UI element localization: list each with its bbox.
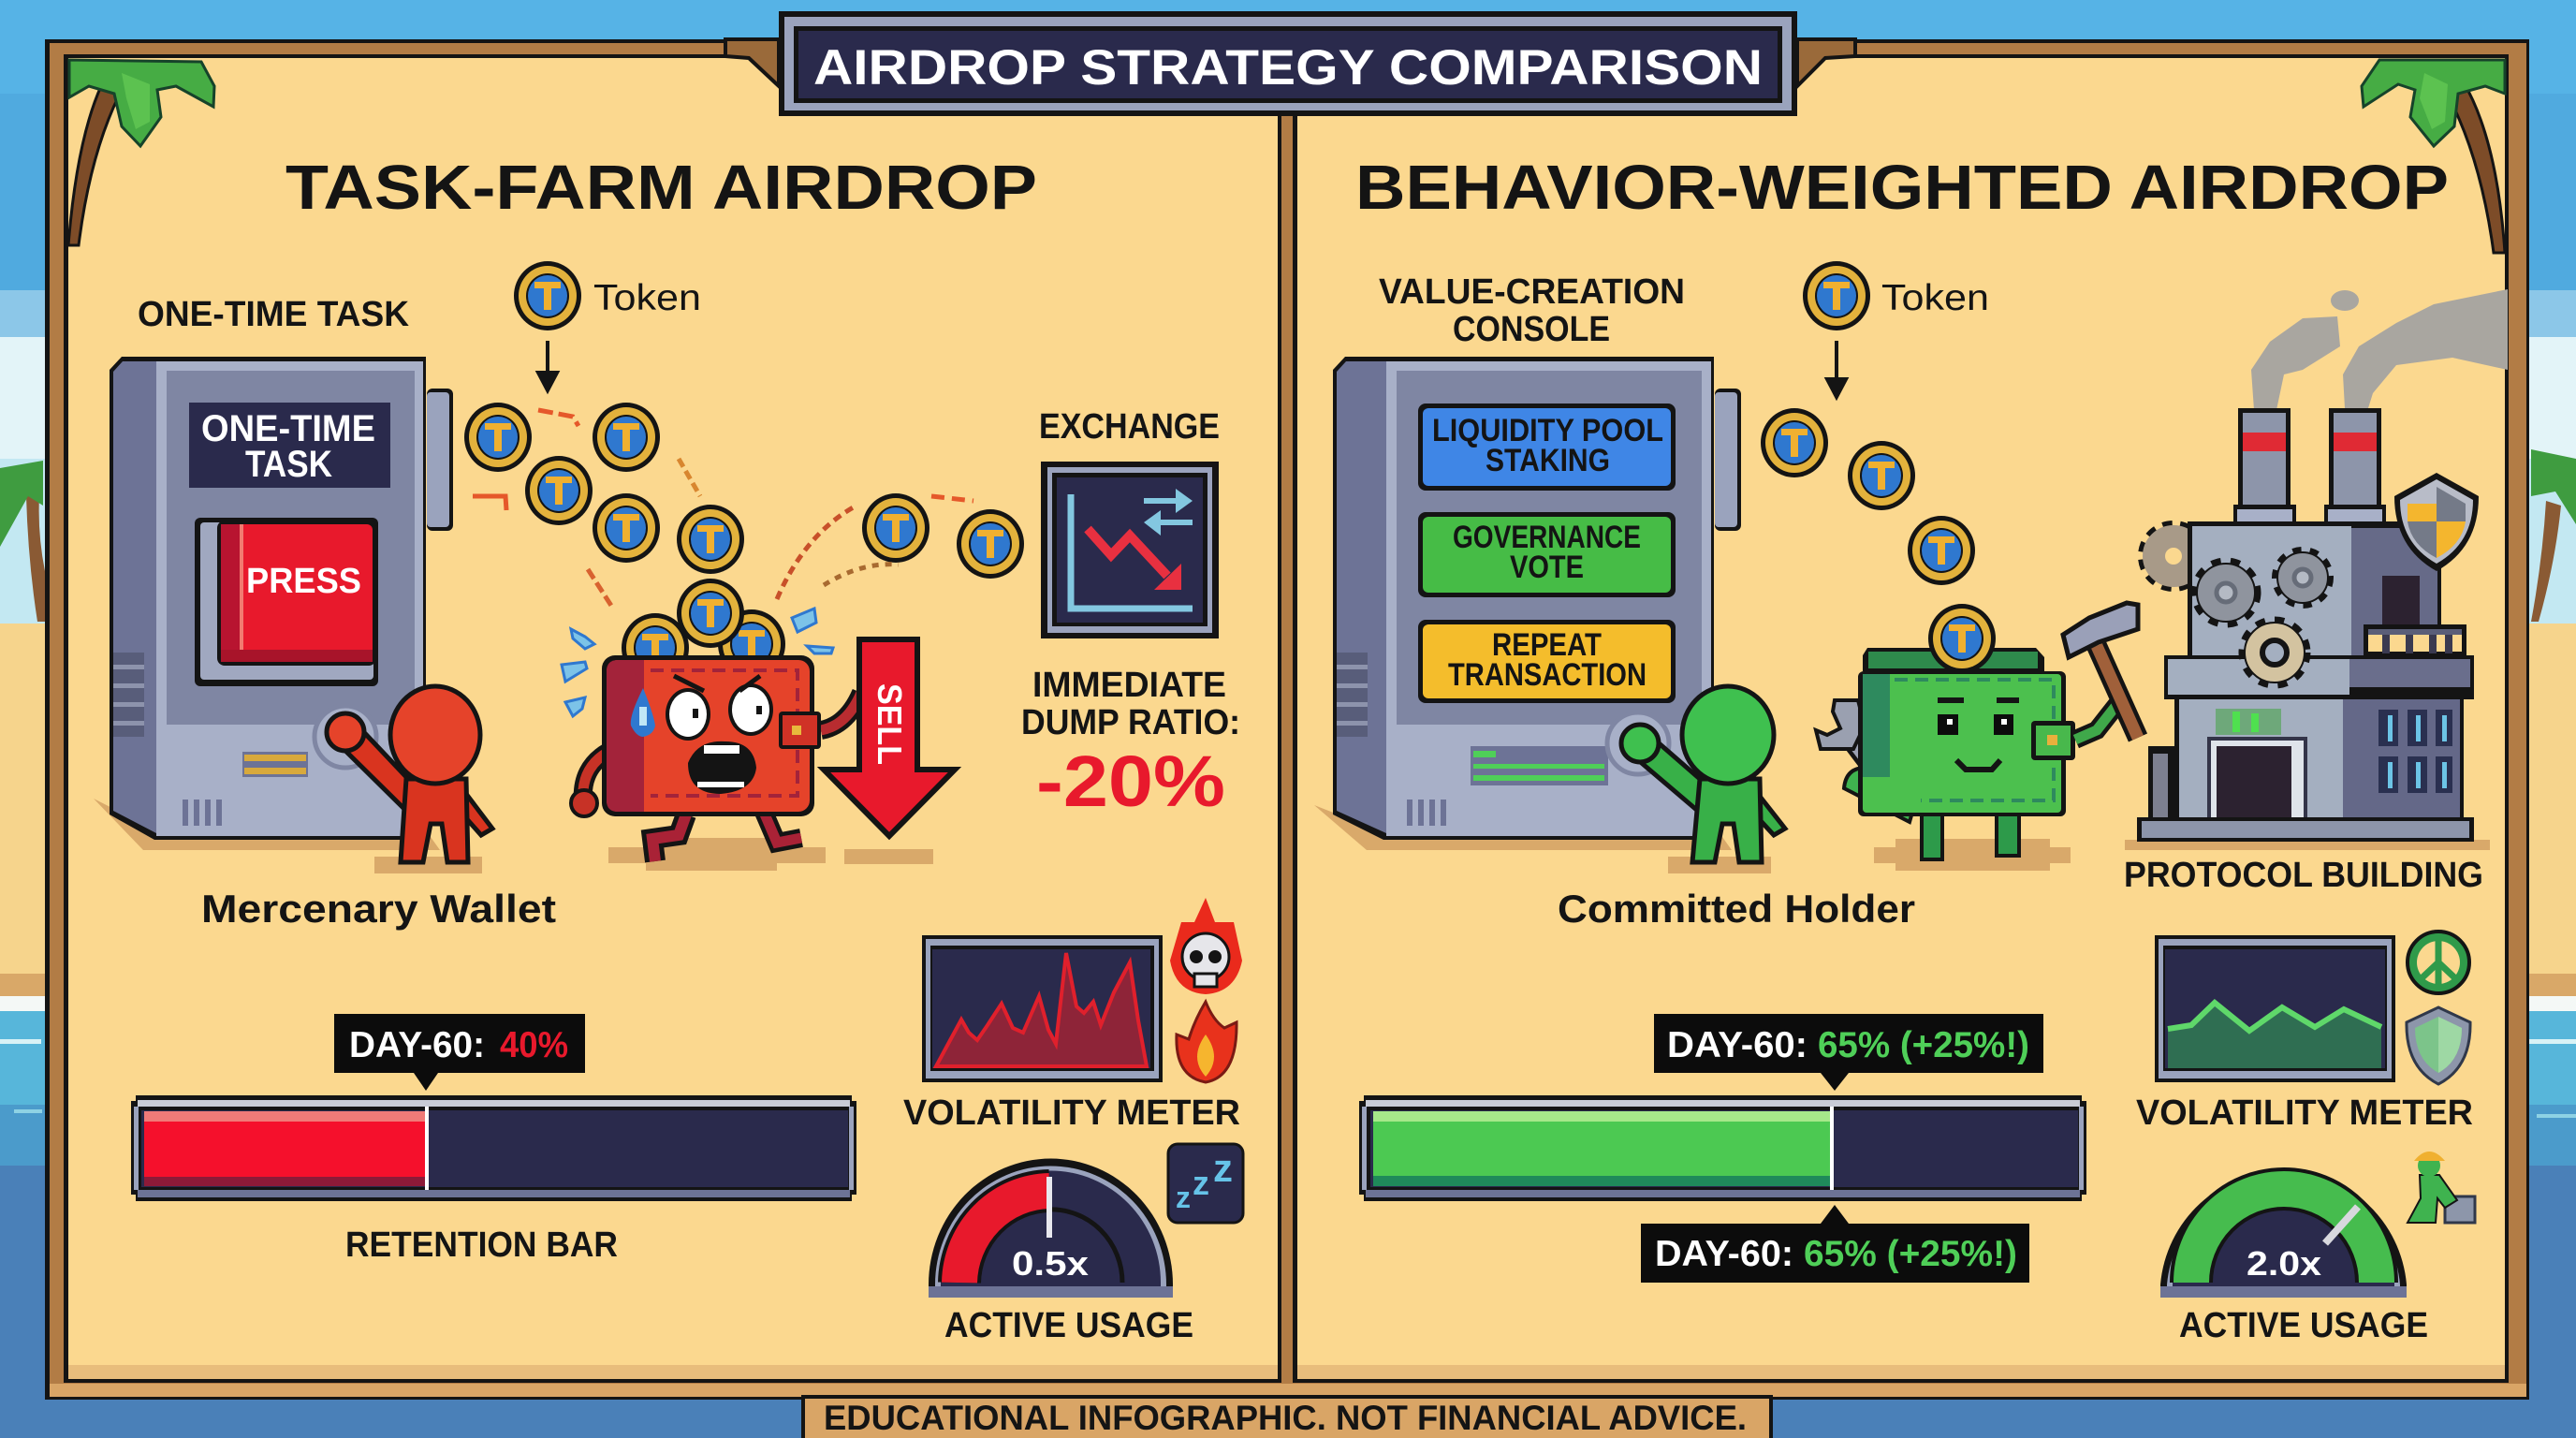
- motion arrows: [473, 410, 973, 609]
- icon: falling coins: [1761, 408, 1975, 585]
- label: token: Token: [1881, 278, 1989, 318]
- retention value: 40%: [500, 1025, 568, 1065]
- label: exchange: EXCHANGE: [1039, 407, 1220, 447]
- label: volatility meter: VOLATILITY METER: [2136, 1093, 2473, 1133]
- screen label: TASK: [245, 444, 332, 485]
- tooltip: day-60 retention: DAY-60:: [349, 1025, 485, 1065]
- disclaimer: EDUCATIONAL INFOGRAPHIC. NOT FINANCIAL ADVICE.: [824, 1399, 1747, 1437]
- machine: value-creation console: [1314, 357, 1741, 850]
- retention bar: [1359, 1095, 2086, 1201]
- icon: token: [1803, 261, 1870, 330]
- title: AIRDROP STRATEGY COMPARISON: [813, 40, 1763, 95]
- gauge value: 2.0x: [2247, 1244, 2321, 1283]
- screen label: ONE-TIME: [201, 408, 375, 449]
- label: protocol building: PROTOCOL BUILDING: [2124, 856, 2483, 895]
- icon: sleeping zzz: z: [1176, 1181, 1191, 1214]
- label: volatility meter: VOLATILITY METER: [903, 1093, 1240, 1133]
- icon: peace sign: [2408, 932, 2469, 993]
- label: mercenary wallet: Mercenary Wallet: [201, 887, 556, 931]
- arrow: token drop: [1827, 341, 1846, 397]
- retention bar: [131, 1095, 856, 1201]
- button: governance vote: GOVERNANCE: [1453, 520, 1641, 555]
- tooltip: day-60 retention top: [1654, 1014, 2043, 1091]
- center divider: [1278, 112, 1297, 1383]
- gauge value: 0.5x: [1012, 1244, 1089, 1283]
- icon: exchange screen: [1041, 462, 1219, 638]
- icon: wooden bracket left: [725, 39, 779, 86]
- shadow under figures: [374, 838, 933, 873]
- icon: smoke: [2251, 289, 2508, 410]
- footer plaque: [801, 1395, 1773, 1438]
- button: repeat transaction: TRANSACTION: [1448, 657, 1647, 693]
- panel: task-farm airdrop: [94, 153, 1243, 1345]
- icon: sleeping zzz: z: [1193, 1164, 1209, 1202]
- tooltip: day-60 retention bottom: [1641, 1205, 2029, 1283]
- label: active usage: ACTIVE USAGE: [2179, 1306, 2428, 1345]
- heading: behavior-weighted: BEHAVIOR-WEIGHTED AIRDROP: [1355, 153, 2449, 223]
- label: committed holder: Committed Holder: [1558, 887, 1915, 931]
- label: console: CONSOLE: [1453, 310, 1610, 349]
- icon: flaming skull: [1170, 898, 1242, 994]
- icon: flame: [1177, 1002, 1237, 1082]
- icon: wrench: [1816, 700, 1875, 770]
- retention value: 65% (+25%!): [1804, 1234, 2017, 1274]
- character: green holder: [1607, 686, 1785, 862]
- callout: dump ratio: IMMEDIATE: [1032, 666, 1226, 705]
- button: liquidity pool staking: STAKING: [1486, 443, 1610, 478]
- retention value: 65% (+25%!): [1818, 1025, 2029, 1065]
- button: governance vote: [1418, 512, 1676, 597]
- dump ratio value: -20%: [1036, 741, 1225, 822]
- tooltip: day-60 retention: [334, 1014, 585, 1091]
- tooltip: day-60 retention bottom: DAY-60:: [1655, 1234, 1793, 1274]
- button label: PRESS: [246, 562, 361, 601]
- callout: dump ratio: [1021, 666, 1240, 822]
- button: governance vote: VOTE: [1510, 550, 1584, 585]
- icon: sleeping zzz: z: [1213, 1146, 1233, 1190]
- icon: shield on factory: [2394, 473, 2479, 571]
- button: repeat transaction: REPEAT: [1492, 627, 1602, 663]
- title plaque: [779, 11, 1797, 116]
- icon: gears: [2195, 550, 2330, 684]
- volatility meter: spiky: [922, 935, 1163, 1082]
- icon: hammer: [2063, 603, 2138, 738]
- dump ratio label: DUMP RATIO:: [1021, 703, 1240, 742]
- button: liquidity pool staking: LIQUIDITY POOL: [1432, 413, 1663, 448]
- shadow under figures: [1668, 839, 2071, 873]
- heading: task-farm: TASK-FARM AIRDROP: [285, 153, 1037, 223]
- icon: wooden bracket right: [1797, 39, 1855, 86]
- panel: behavior-weighted airdrop: [1314, 153, 2508, 1345]
- sell label: SELL: [871, 683, 909, 765]
- label: active usage: ACTIVE USAGE: [944, 1306, 1193, 1345]
- icon: builder: [2408, 1152, 2475, 1223]
- label: one-time task: ONE-TIME TASK: [138, 295, 410, 334]
- icon: sweat drops: [562, 609, 833, 716]
- arrow: token drop: [538, 341, 557, 390]
- gauge: active usage high: [2160, 1171, 2407, 1298]
- tooltip: day-60 retention top: DAY-60:: [1667, 1025, 1808, 1065]
- icon: palm top left: [68, 60, 214, 245]
- machine: one-time task: [94, 357, 453, 850]
- icon: token: [514, 261, 581, 330]
- button: repeat transaction: [1418, 620, 1676, 703]
- button: liquidity pool staking: [1418, 404, 1676, 491]
- character: mercenary wallet: [571, 655, 861, 861]
- arrow: sell: [824, 639, 955, 836]
- character: red farmer: [315, 686, 492, 862]
- icon: falling coins: [464, 403, 1024, 682]
- icon: back gear: [2143, 525, 2204, 587]
- icon: distant palm right: [2531, 449, 2576, 622]
- icon: sleeping zzz: [1168, 1144, 1243, 1223]
- label: retention bar: RETENTION BAR: [345, 1225, 618, 1265]
- icon: green shield: [2407, 1007, 2470, 1084]
- icon: distant palm left: [0, 461, 45, 622]
- icon: protocol factory: [2125, 408, 2490, 850]
- label: value-creation console: VALUE-CREATION: [1379, 272, 1685, 312]
- volatility meter: stable: [2155, 935, 2395, 1082]
- icon: palm top right: [2362, 60, 2505, 253]
- label: token: Token: [593, 278, 701, 318]
- character: committed holder wallet: [1844, 604, 2117, 859]
- gauge: active usage low: [929, 1159, 1173, 1298]
